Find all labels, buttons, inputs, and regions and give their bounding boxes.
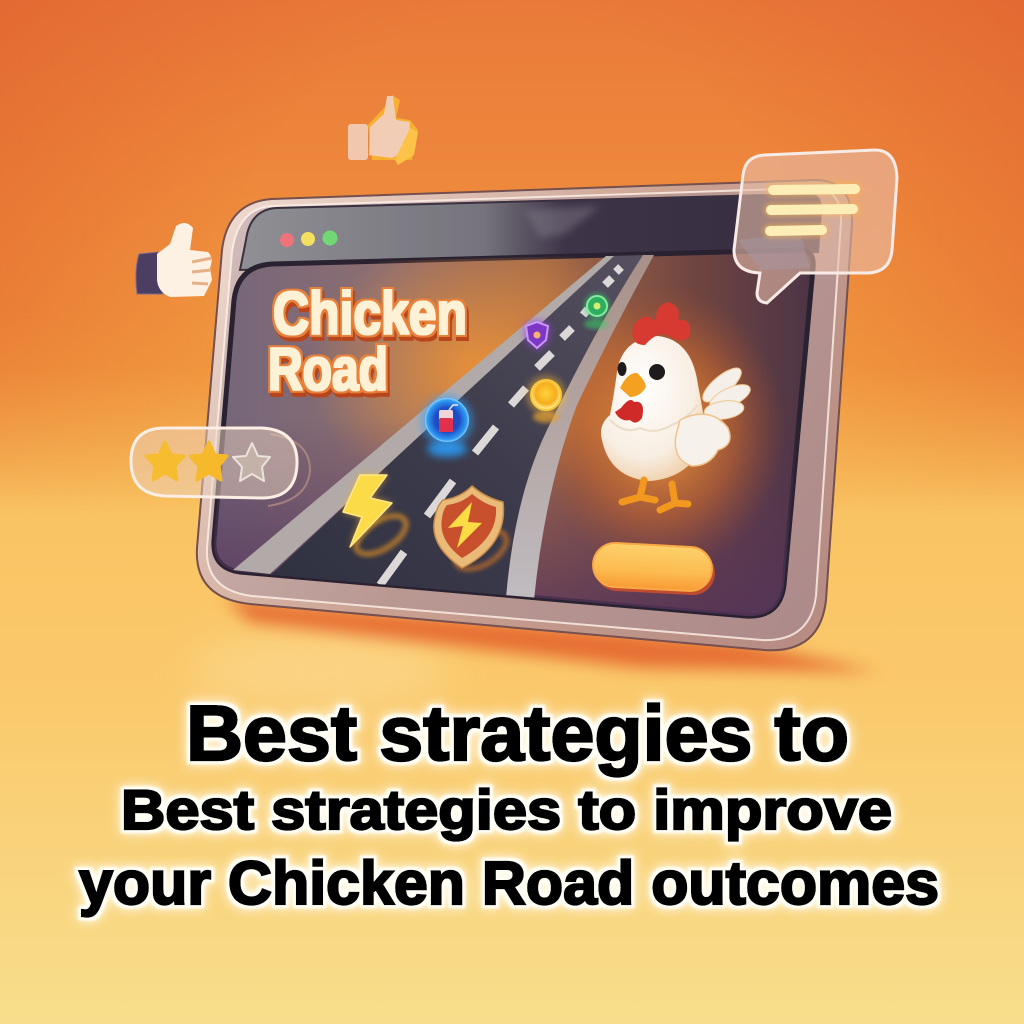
game title: Road: [268, 336, 388, 403]
button: [592, 542, 716, 596]
eyes: [618, 362, 665, 380]
icon: coin: [527, 376, 565, 423]
bubble line glow: [770, 189, 855, 231]
game title: [268, 280, 467, 403]
game title: Chicken: [273, 280, 467, 347]
right rail: [506, 255, 654, 600]
chicken: [601, 302, 754, 510]
lane dashes: [380, 267, 621, 585]
comb: [632, 302, 690, 345]
floor shadow: [225, 598, 880, 672]
neck ruff line: [610, 405, 698, 431]
icon: purple shield: [524, 320, 550, 350]
title block: [79, 689, 939, 917]
background vignette: [0, 0, 1024, 480]
chat bubble: [734, 150, 897, 303]
title line 2: Best strategies to improve: [121, 778, 892, 841]
floor reflection: [190, 630, 450, 710]
star rating pill: [131, 428, 310, 506]
screen contents: [214, 255, 795, 616]
bar gloss: [525, 206, 600, 238]
warm glow left: [326, 256, 620, 468]
lower shade: [214, 441, 795, 616]
left rail: [233, 256, 614, 574]
beak: [620, 373, 646, 397]
icon: blue potion orb: [421, 395, 473, 457]
title line 3: your Chicken Road outcomes: [79, 849, 939, 917]
window dots: [280, 230, 338, 247]
lower bubble tint: [738, 232, 810, 270]
title line 1: Best strategies to: [186, 689, 849, 777]
browser bar: [240, 194, 821, 270]
bubble lines: [770, 189, 855, 231]
frame inner highlight: [207, 188, 841, 640]
chicken glow: [562, 300, 777, 553]
icon: lightning bolt: [343, 475, 412, 562]
thumbs up top: [348, 95, 418, 165]
tablet frame: [79, 95, 939, 917]
icon: green orb: [584, 293, 610, 329]
back wing: [698, 363, 754, 422]
feet: [622, 480, 688, 510]
thumbs up left: [136, 223, 212, 297]
pill ghost ring: [268, 434, 310, 506]
icon: shield with bolt: [434, 486, 513, 577]
front wing: [675, 414, 730, 466]
wattle: [615, 400, 643, 423]
chicken body: [601, 336, 706, 481]
road surface: [268, 255, 645, 600]
screen: [214, 250, 813, 616]
